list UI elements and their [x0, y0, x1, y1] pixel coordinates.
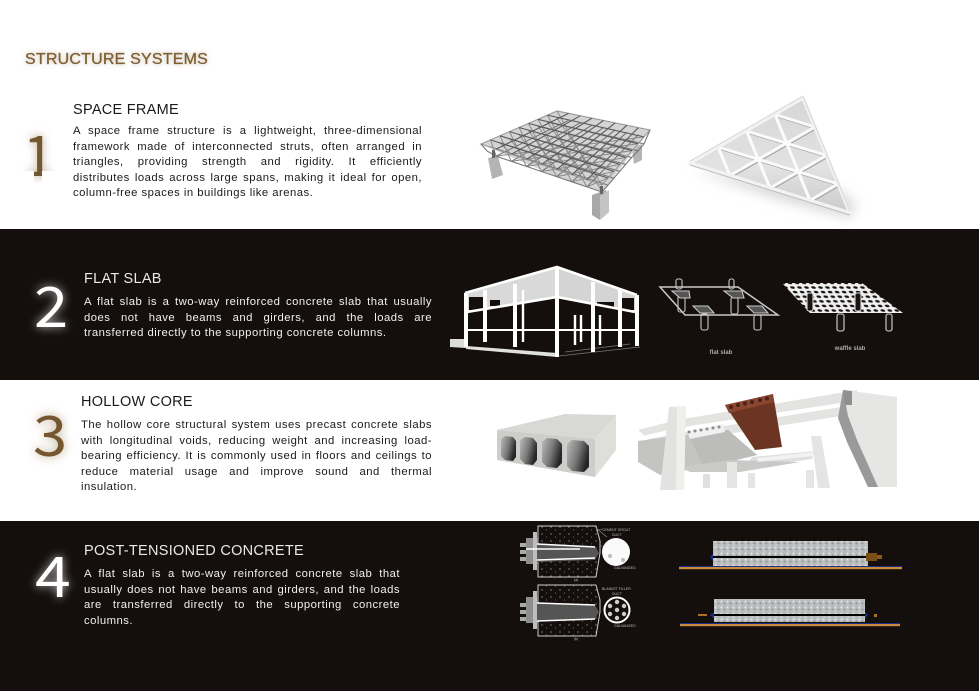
illustration: tendon anchorage details: (a)	[574, 578, 578, 582]
panel: flat slab	[0, 229, 979, 380]
text: space frame description	[73, 125, 422, 199]
illustration: flat slab diagram: flat slab	[710, 350, 733, 356]
text: post-tensioned description: columns.	[84, 615, 133, 627]
panel: space frame	[25, 96, 858, 220]
text: space frame description: A space frame structure is a lightweight, three-dimensional	[73, 125, 422, 137]
text: space frame description: framework made of interconnected struts, often arranged in	[73, 141, 422, 153]
illustration: tendon anchorage details: GALVANIZED	[614, 566, 636, 570]
text: flat slab description	[84, 296, 432, 339]
number 2: 2	[34, 263, 68, 344]
panel: post-tensioned concrete	[0, 521, 979, 691]
text: space frame description: distributes loads across large spans, making it ideal for open,	[73, 172, 422, 184]
text: hollow core description: The hollow core structural system uses precast concrete slabs	[81, 419, 432, 431]
illustration: tendon anchorage details: GALVANIZED	[614, 624, 636, 628]
illustration: flat slab diagram	[658, 278, 780, 356]
text: hollow core description: with longitudinal voids, reducing weight and increasing load-	[81, 435, 432, 447]
title: post-tensioned concrete: POST-TENSIONED CONCRETE	[84, 543, 304, 559]
illustration: tendon anchorage details: BLANKET FILLER	[602, 587, 631, 591]
illustration: tendon anchorage details: CEMENT GROUT	[602, 528, 631, 532]
title: space frame: SPACE FRAME	[73, 102, 179, 118]
illustration: tendon anchorage details: (b)	[574, 637, 578, 641]
text: post-tensioned description: A flat slab is a two-way reinforced concrete slab that	[84, 568, 400, 580]
text: space frame description: column-free spaces in buildings like arenas.	[73, 187, 313, 199]
title: hollow core: HOLLOW CORE	[81, 394, 193, 410]
illustration: space frame lattice on four piers	[480, 110, 651, 220]
title: flat slab: FLAT SLAB	[84, 271, 162, 287]
text: flat slab description: A flat slab is a two-way reinforced concrete slab that usually	[84, 296, 432, 308]
heading: structure systems: STRUCTURE SYSTEMS	[25, 51, 208, 68]
illustration: post-tensioning stages on formwork	[679, 541, 902, 626]
illustration: hollow core slab block	[497, 414, 616, 477]
text: post-tensioned description: usually does not have beams and girders, and the loads	[84, 584, 400, 596]
panel: hollow core	[0, 380, 979, 521]
illustration: waffle slab diagram: waffle slab	[834, 346, 866, 352]
illustration: waffle slab diagram	[783, 283, 903, 352]
illustration: tendon anchorage details: DUCT	[612, 592, 623, 596]
illustration: tendon anchorage details: DUCT	[612, 533, 623, 537]
text: space frame description: triangles, providing strength and rigidity. It efficiently	[73, 156, 422, 168]
text: hollow core description: reduce material usage and improve sound and thermal	[81, 466, 432, 478]
text: hollow core description: bearing efficiency. It is commonly used in floors and ceilings to	[81, 450, 432, 462]
text: post-tensioned description: are transferred directly to the supporting concrete	[84, 599, 400, 611]
illustration: triangular truss	[688, 96, 858, 220]
text: hollow core description: insulation.	[81, 481, 137, 493]
text: hollow core description	[81, 419, 432, 493]
text: post-tensioned description	[84, 568, 400, 627]
number 4: 4	[35, 533, 71, 614]
number 1: 1	[23, 112, 54, 193]
illustration: flat slab building frame	[450, 266, 640, 357]
text: flat slab description: does not have beams and girders, and the loads are	[84, 312, 432, 324]
illustration: hollow core slabs on beams and columns	[638, 390, 897, 490]
text: flat slab description: transferred directly to the supporting concrete columns.	[84, 327, 387, 339]
illustration: tendon anchorage details	[520, 526, 636, 641]
number 3: 3	[33, 392, 67, 473]
